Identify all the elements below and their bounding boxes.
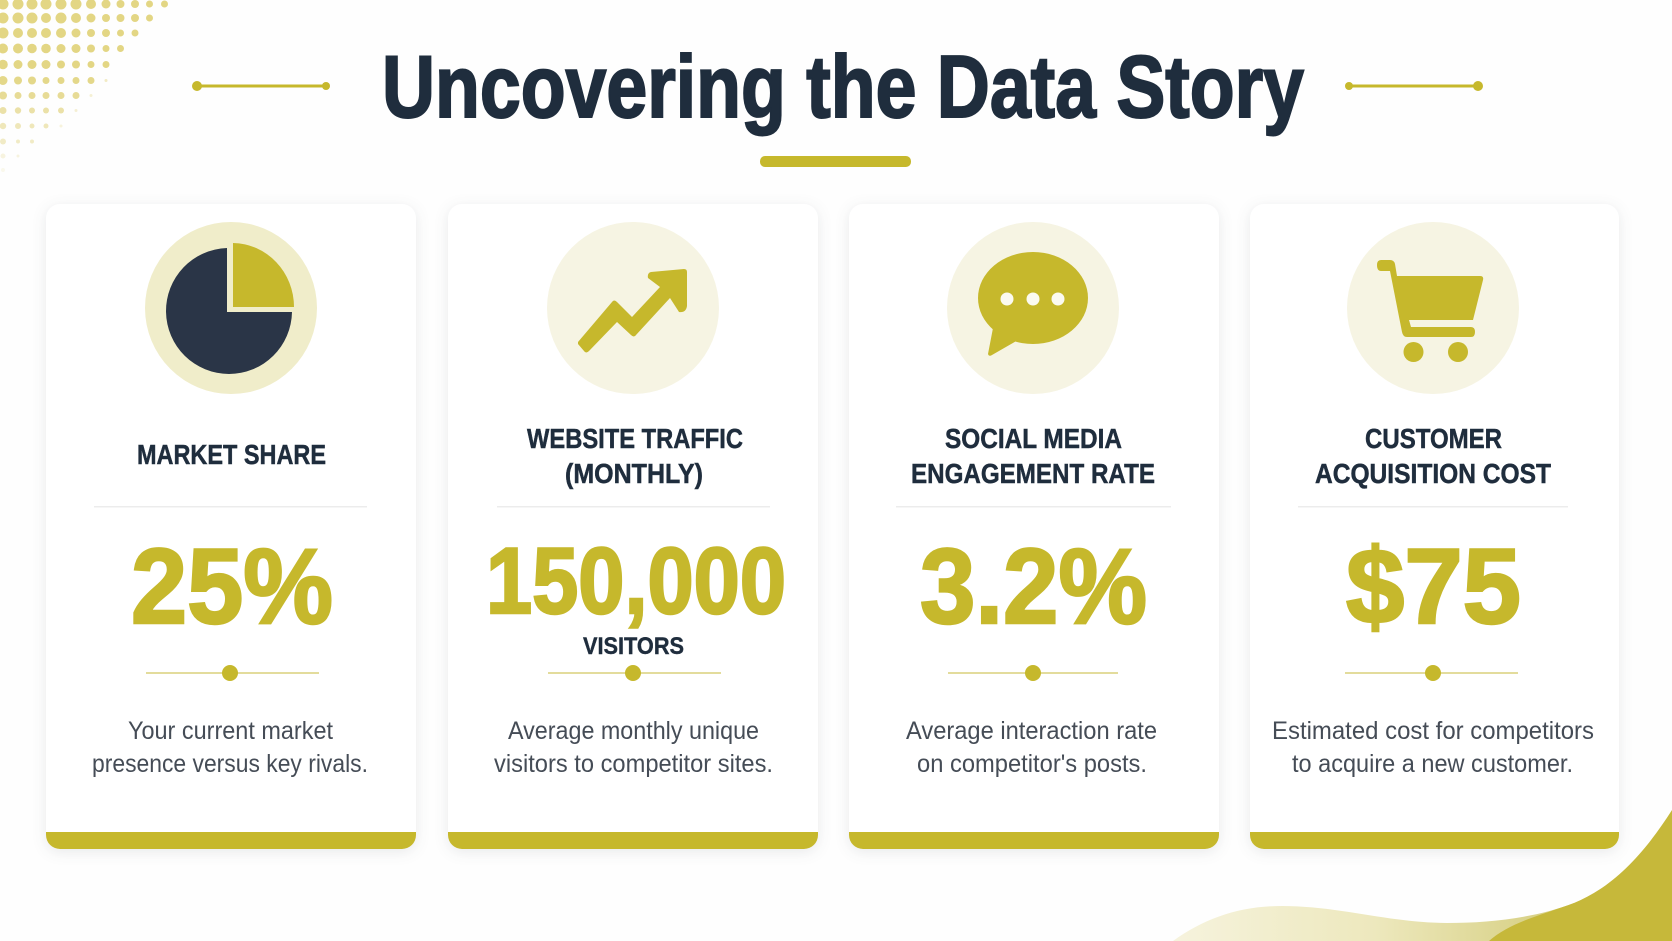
value separator (948, 665, 1118, 681)
description: Average interaction rate (906, 717, 1157, 745)
corner wave: dark (1489, 810, 1672, 941)
icon: trend arrow (547, 222, 719, 394)
value separator (548, 665, 721, 681)
description: Your current market (128, 717, 333, 745)
description (1272, 717, 1594, 778)
metric name: (MONTHLY) (565, 458, 703, 489)
panel: website traffic (448, 204, 818, 849)
description (906, 717, 1157, 778)
panel: customer acquisition cost (1250, 204, 1619, 849)
metric value: $75 (1346, 526, 1521, 646)
corner wave: light (1173, 903, 1600, 941)
right title ornament (1345, 81, 1483, 91)
halftone dot pattern (0, 0, 168, 172)
description: Average monthly unique (508, 717, 759, 745)
description: to acquire a new customer. (1292, 750, 1573, 778)
icon: shopping cart (1347, 222, 1519, 394)
description: visitors to competitor sites. (494, 750, 773, 778)
metric value: 150,000 (486, 528, 786, 633)
metric name (911, 423, 1155, 489)
description (494, 717, 773, 778)
heading text: Uncovering the Data Story (382, 37, 1304, 136)
value unit: VISITORS (583, 633, 684, 660)
title underline (760, 156, 911, 167)
metric name: ACQUISITION COST (1315, 458, 1551, 489)
metric value: 3.2% (920, 526, 1147, 646)
description: presence versus key rivals. (92, 750, 368, 778)
panel: market share (46, 204, 416, 849)
metric name: MARKET SHARE (137, 439, 326, 470)
icon: pie chart (145, 222, 317, 394)
metric name: CUSTOMER (1365, 423, 1502, 454)
value separator (1345, 665, 1518, 681)
metric name (1315, 423, 1551, 489)
description (92, 717, 368, 778)
metric name: WEBSITE TRAFFIC (527, 423, 743, 454)
metric value: 25% (131, 526, 333, 646)
icon: speech bubble (947, 222, 1119, 394)
description: on competitor's posts. (917, 750, 1147, 778)
left title ornament (192, 81, 330, 91)
metric name: SOCIAL MEDIA (945, 423, 1122, 454)
title block (192, 37, 1483, 167)
metric name: ENGAGEMENT RATE (911, 458, 1155, 489)
metric name (527, 423, 743, 489)
panel: social media engagement (849, 204, 1219, 849)
value separator (146, 665, 319, 681)
description: Estimated cost for competitors (1272, 717, 1594, 745)
